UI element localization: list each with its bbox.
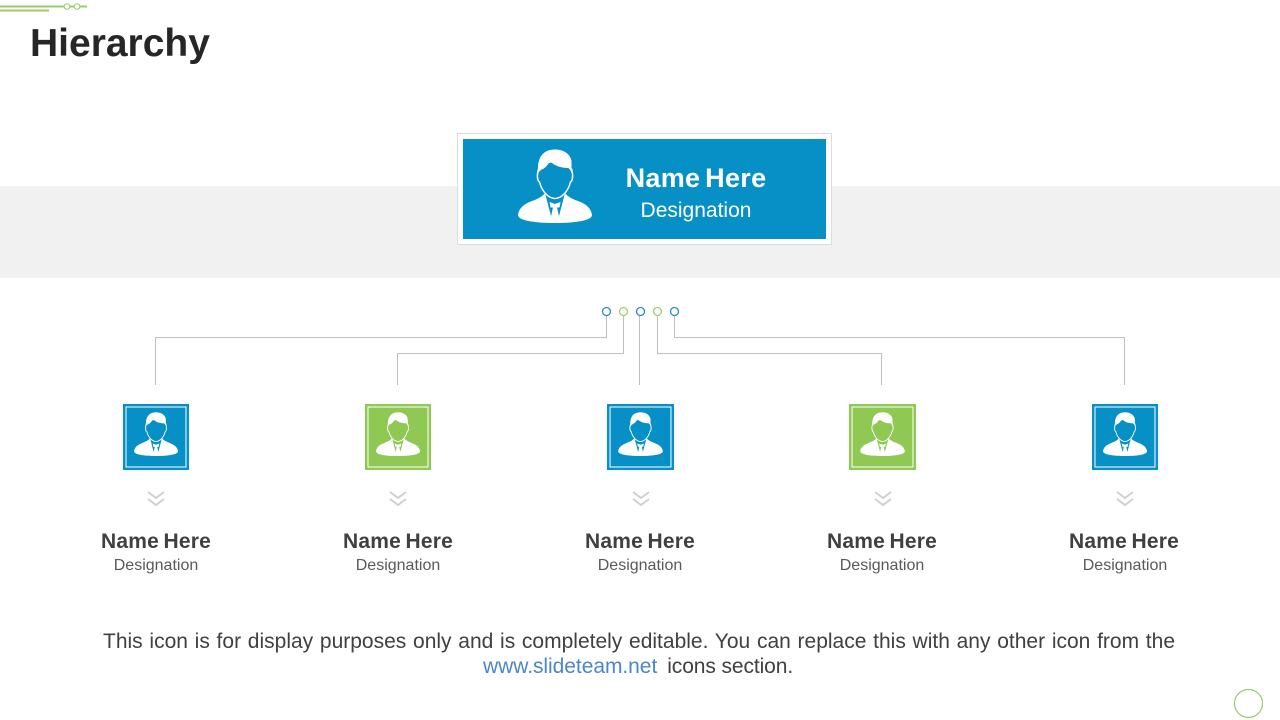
chevron 5 [1116, 491, 1134, 506]
chevron 3 [632, 491, 650, 506]
person tile 1 [123, 404, 189, 470]
member text 5: Designation [1083, 557, 1167, 574]
header accent lines [0, 3, 87, 12]
footer note [103, 630, 1175, 678]
grey background band [0, 186, 1280, 278]
member text 2 [343, 530, 453, 574]
person tile 3 [607, 404, 674, 470]
person tile 4 [849, 404, 916, 470]
chevron 1 [148, 491, 164, 506]
corner circle [1234, 688, 1264, 718]
footer note: www.slideteam.net icons section. [483, 655, 793, 678]
member text 1 [101, 530, 211, 574]
chevron 4 [874, 491, 892, 506]
member text 1: Designation [114, 557, 198, 574]
member text 3: Designation [598, 557, 682, 574]
member text 2: Name Here [343, 530, 453, 553]
member text 2: Designation [356, 557, 440, 574]
member text 5: Name Here [1069, 530, 1179, 553]
top card designation: Designation [641, 199, 751, 222]
person tile 5 [1092, 404, 1158, 470]
top card name: Name Here [626, 163, 766, 193]
footer note: This icon is for display purposes only and is completely editable. You can replace this with any other icon from the [103, 630, 1175, 653]
member text 4: Name Here [827, 530, 937, 553]
member text 3 [585, 530, 695, 574]
member text 3: Name Here [585, 530, 695, 553]
icon: person [518, 150, 592, 223]
top profile card [457, 133, 832, 245]
title: Hierarchy [30, 22, 210, 65]
member text 4 [827, 530, 937, 574]
member text 4: Designation [840, 557, 924, 574]
chevron 2 [390, 491, 406, 506]
connector tree [155, 306, 1125, 385]
member text 1: Name Here [101, 530, 211, 553]
top card blue panel [463, 139, 826, 239]
person tile 2 [365, 404, 431, 470]
member text 5 [1069, 530, 1179, 574]
